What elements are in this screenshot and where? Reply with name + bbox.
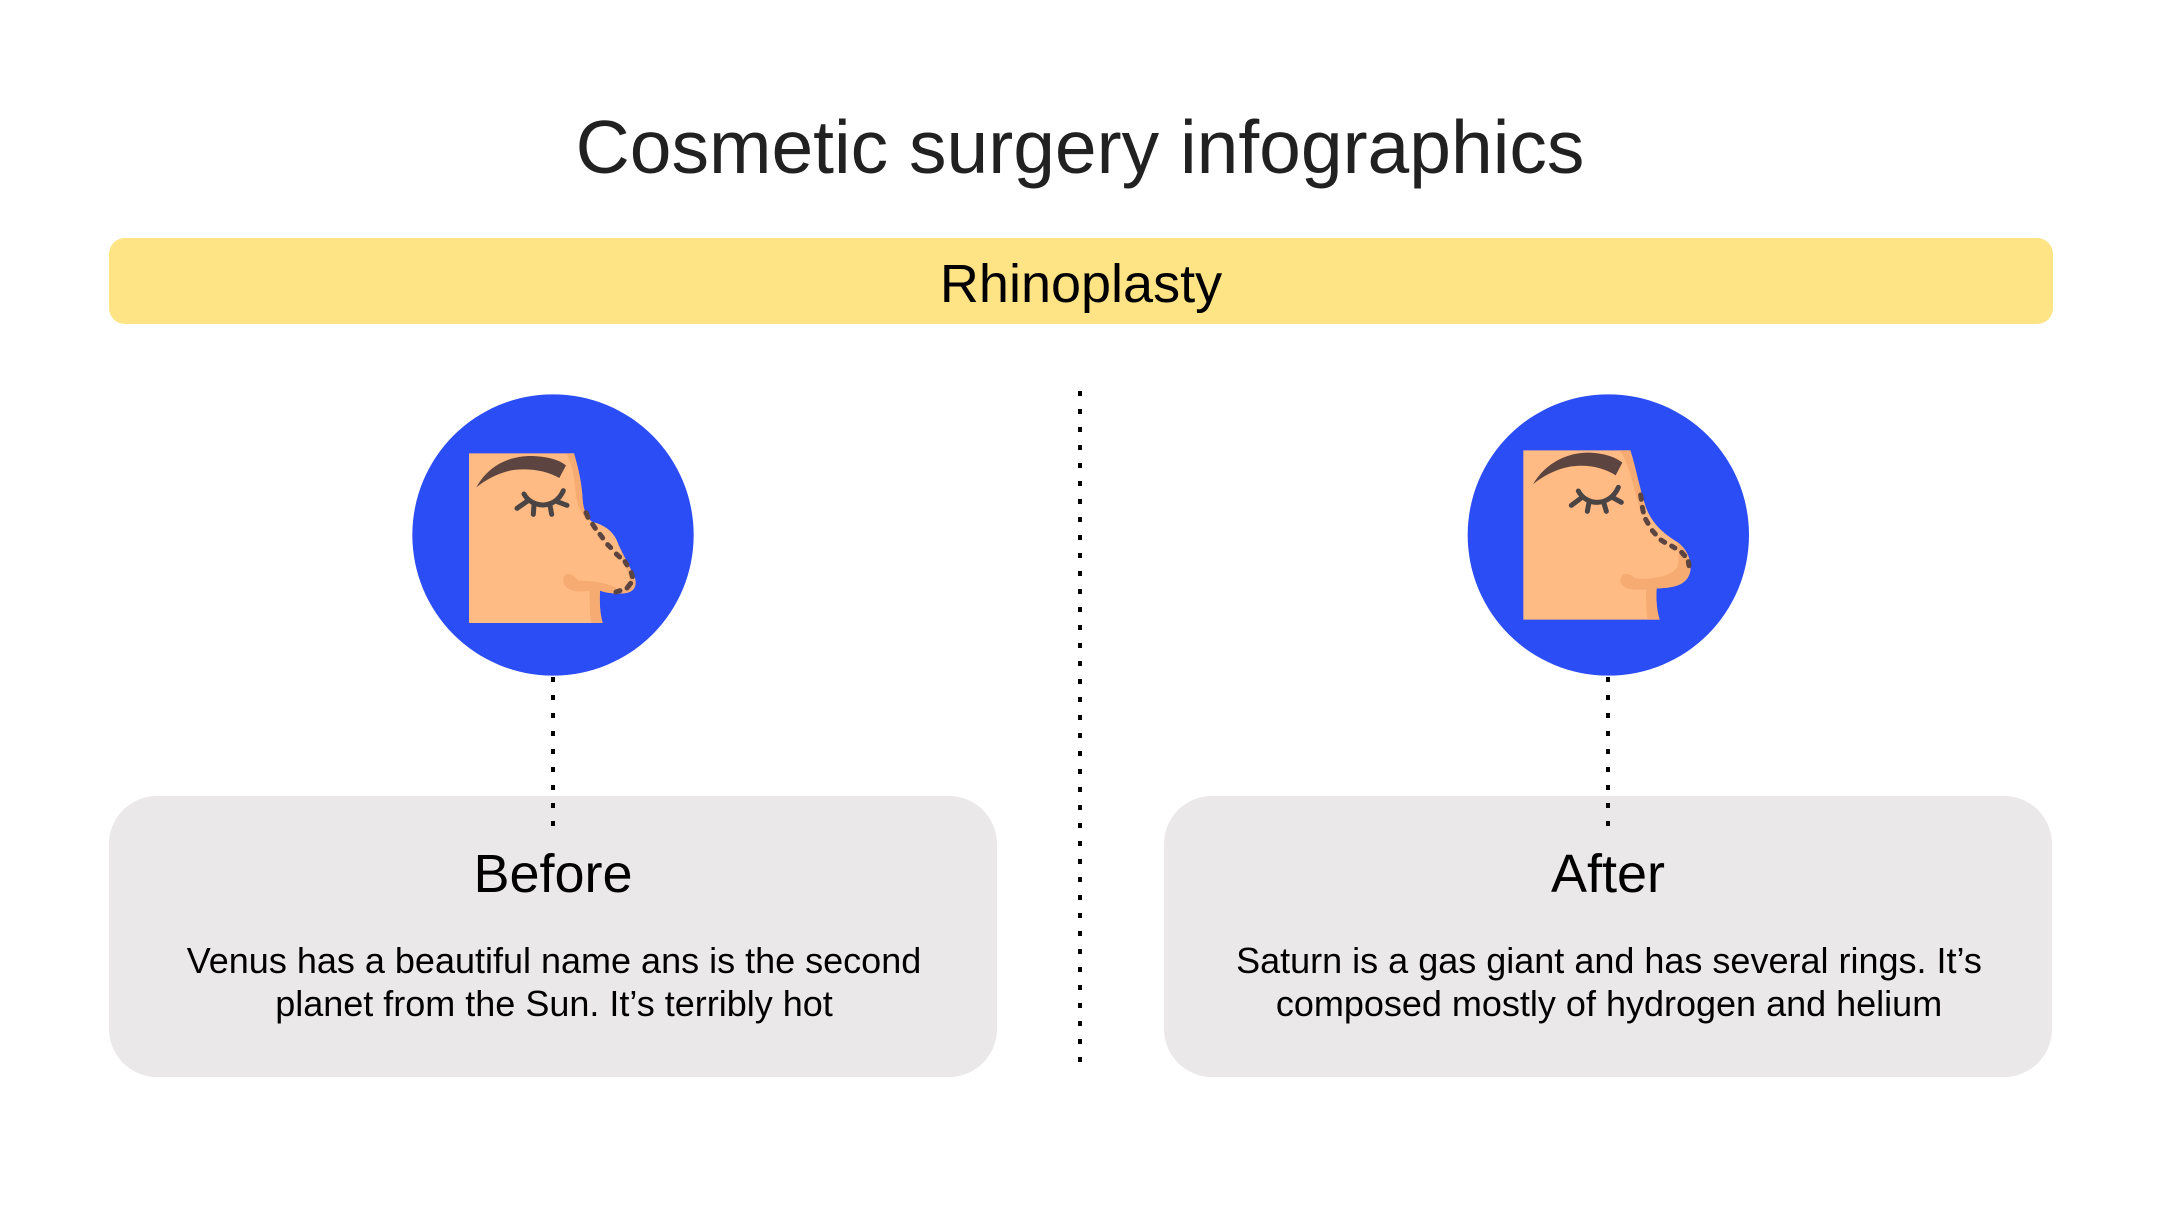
banner: Rhinoplasty: Rhinoplasty [940, 254, 1222, 314]
connector: before [551, 677, 555, 827]
icon: nose after surgery [1468, 394, 1749, 676]
text: after description: Saturn is a gas giant and has several rings. It’s [1236, 940, 1982, 981]
heading: after: After [1551, 844, 1665, 904]
text: before description: planet from the Sun. It’s terribly hot [275, 983, 833, 1024]
text: after description [1236, 940, 1982, 1024]
panel: before [109, 796, 997, 1077]
connector: after [1606, 677, 1610, 827]
text: after description: composed mostly of hydrogen and helium [1276, 983, 1942, 1024]
panel: after [1164, 796, 2052, 1077]
centre dotted divider [1078, 391, 1082, 1064]
banner: Rhinoplasty [109, 238, 2053, 324]
heading: before: Before [473, 844, 633, 904]
icon: nose before surgery [412, 394, 694, 676]
title: Cosmetic surgery infographics [576, 105, 1584, 189]
text: before description: Venus has a beautiful name ans is the second [187, 940, 921, 981]
text: before description [186, 940, 921, 1024]
